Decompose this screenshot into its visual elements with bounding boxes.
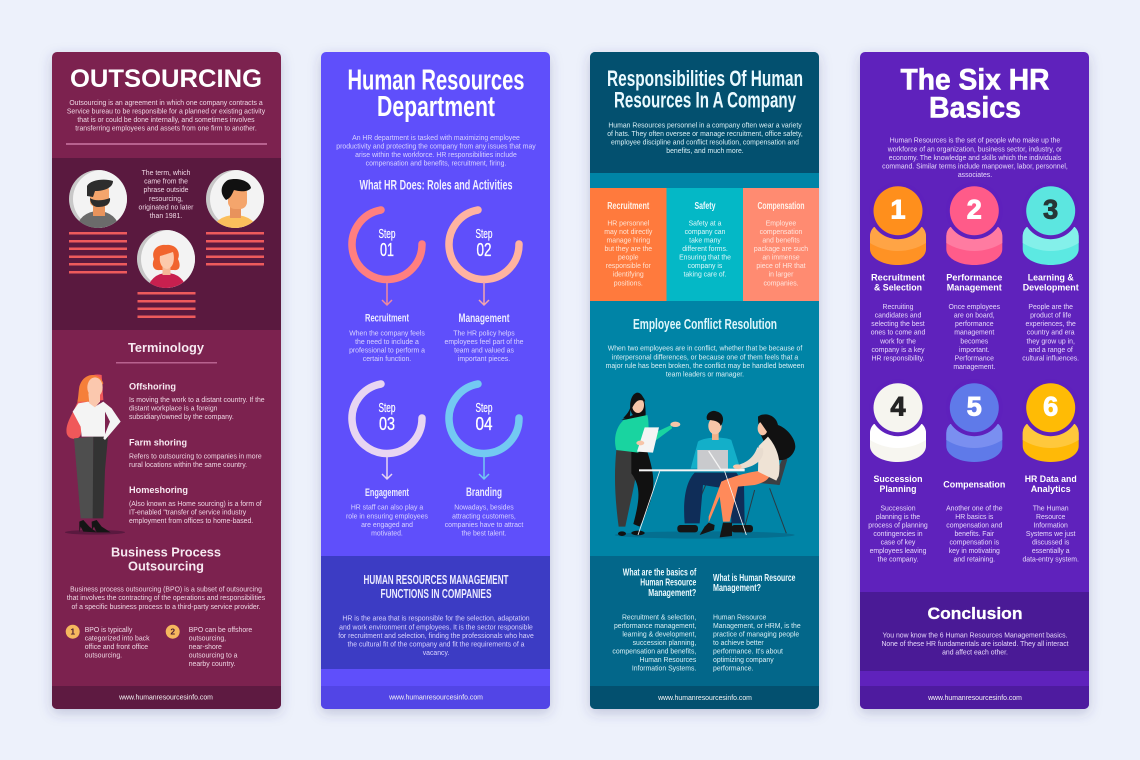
- icon: number 3: [1022, 182, 1079, 265]
- basic 6 text: Resource: [1036, 514, 1066, 521]
- step 01 text: professional to perform a: [349, 347, 425, 354]
- step 03 text: [346, 487, 429, 537]
- intro text: An HR department is tasked with maximizing employee: [352, 135, 520, 142]
- step 02 ring: [449, 210, 519, 279]
- intro text: Human Resources is the set of people who make up the: [890, 138, 1060, 145]
- intro text: compensation and benefits, recruitment, firing.: [366, 161, 506, 168]
- step 04 ring: [449, 384, 519, 453]
- step 04 text: Branding: [466, 487, 502, 499]
- panel: six hr basics: [860, 52, 1089, 709]
- basic 6 text: [1022, 474, 1079, 564]
- conclusion text: and affect each other.: [942, 649, 1008, 656]
- card: safety: different forms.: [682, 246, 728, 253]
- conflict text: interpersonal differences, or because one of them feels that a: [612, 354, 798, 361]
- origin text: came from the: [144, 179, 188, 186]
- a: what is: practice of managing people: [713, 631, 799, 638]
- intro text: [882, 138, 1068, 179]
- q: basics heading: Management?: [648, 587, 696, 599]
- arrow 3: [382, 456, 392, 479]
- basic 5 text: HR basics is: [955, 514, 994, 521]
- step 01 text: the need to include a: [355, 339, 419, 346]
- card: safety: taking care of.: [683, 272, 727, 279]
- basic 3 text: country and era: [1027, 330, 1075, 337]
- origin text: than 1981.: [150, 213, 182, 220]
- band text: HR is the area that is responsible for the selection, adaptation: [342, 616, 530, 623]
- icon: number 2: 2: [967, 194, 982, 224]
- term: offshoring: distant workplace is a foreign: [129, 406, 218, 413]
- basic 6 text: The Human: [1033, 505, 1069, 512]
- intro text: employee discipline and conflict resolution, compensation and: [611, 139, 799, 146]
- bpo point 2: 2: [170, 627, 175, 637]
- intro text: transferring employees and assets from one firm to another.: [75, 126, 257, 133]
- step 02 ring: 02: [476, 239, 492, 260]
- icon: number 1: 1: [890, 194, 906, 224]
- step 01 ring: Step: [378, 227, 396, 241]
- conclusion text: [881, 632, 1069, 656]
- step 01 text: Recruitment: [365, 313, 409, 325]
- step 01 text: certain function.: [363, 356, 411, 363]
- basic 6 text: Analytics: [1031, 484, 1071, 494]
- icon: number 4: 4: [890, 392, 906, 422]
- intro text: arise within the workforce. HR responsibilities include: [355, 152, 517, 159]
- basic 2 text: Performance: [955, 355, 994, 362]
- basic 2 text: important.: [959, 347, 990, 354]
- text lines under person: [206, 232, 264, 266]
- panel: human resources department: [321, 52, 550, 709]
- a: basics: [612, 614, 697, 673]
- card: recruitment: may not directly: [604, 229, 653, 236]
- step 03 ring: Step: [378, 401, 396, 415]
- card: recruitment: positions.: [614, 280, 643, 287]
- basic 1 text: Recruiting: [883, 304, 914, 311]
- basic 3 text: [1022, 273, 1079, 362]
- band text: the cultural fit of the company and fit the requirements of a: [348, 641, 525, 648]
- card: compensation: Employee: [766, 220, 796, 227]
- bpo paragraph: Business process outsourcing (BPO) is a subset of outsourcing: [70, 587, 262, 594]
- conflict text: major rule has been broken, the conflict may be handled between: [606, 363, 805, 370]
- bpo paragraph: that involves the contracting of the operations and responsibilities: [67, 595, 266, 602]
- heading: conflict resolution: Employee Conflict Resolution: [633, 316, 777, 333]
- bpo point 1: BPO is typically: [85, 627, 133, 634]
- avatar: red haired woman: [137, 230, 195, 288]
- title: outsourcing: OUTSOURCING: [70, 65, 262, 93]
- panel: outsourcing: [52, 52, 281, 709]
- step 02 text: employees feel part of the: [445, 339, 524, 346]
- a: basics: compensation and benefits,: [612, 649, 696, 656]
- basic 6 text: discussed is: [1032, 540, 1070, 547]
- card: safety: [666, 188, 743, 301]
- text lines under woman: [138, 292, 196, 318]
- bpo point 2: outsourcing,: [189, 636, 226, 643]
- card: safety: Safety: [694, 200, 716, 212]
- a: basics: Human Resources: [639, 657, 697, 664]
- title: Human Resources: [348, 64, 524, 96]
- q: what is heading: What is Human Resource: [713, 572, 796, 584]
- card: compensation: in larger: [769, 272, 794, 279]
- icon: number 5: 5: [967, 392, 982, 422]
- band heading: [364, 572, 509, 601]
- conflict text: When two employees are in conflict, whether that be because of: [608, 346, 802, 353]
- step 02 ring: Step: [476, 227, 493, 241]
- icon: number 3: 3: [1043, 194, 1058, 224]
- basic 1 text: company is a key: [872, 347, 925, 354]
- card: safety: company can: [685, 229, 726, 236]
- step 02 text: Management: [458, 313, 510, 325]
- q: what is heading: Management?: [713, 582, 761, 594]
- basic 2 text: management.: [953, 364, 995, 371]
- card: recruitment: HR personnel: [607, 220, 650, 227]
- a: what is: Human Resource: [713, 614, 767, 621]
- a: basics: succession planning,: [633, 640, 696, 647]
- title: [607, 66, 803, 112]
- band text: vacancy.: [423, 650, 449, 657]
- card: compensation: Compensation: [758, 200, 804, 212]
- step 03 text: are engaged and: [361, 522, 413, 529]
- intro text: [607, 122, 803, 155]
- bpo point 2: outsourcing to a: [189, 653, 238, 660]
- origin text: resourcing,: [149, 196, 183, 203]
- step 04 ring: 04: [476, 413, 492, 434]
- a: what is: performance. It's about: [713, 649, 783, 656]
- bpo point 1: outsourcing.: [85, 653, 122, 660]
- basic 2 text: [946, 273, 1002, 371]
- basic 5 text: key in motivating: [949, 548, 1000, 555]
- icon: number 2: [946, 182, 1003, 265]
- basic 1 text: selecting the best: [871, 321, 925, 328]
- title: Resources In A Company: [614, 87, 797, 112]
- term: offshoring: Offshoring: [129, 382, 176, 392]
- basic 5 text: Another one of the: [946, 505, 1003, 512]
- step 01 ring: [352, 210, 422, 279]
- heading: business process outsourcing: [111, 546, 221, 574]
- basic 3 text: Learning &: [1028, 273, 1074, 283]
- basic 1 text: & Selection: [874, 283, 922, 293]
- origin text: The term, which: [142, 170, 191, 177]
- bpo point 1: categorized into back: [85, 636, 150, 643]
- intro text: workforce of an organization, business sector, industry, or: [887, 146, 1063, 153]
- footer url: www.humanresourcesinfo.com: [657, 695, 752, 702]
- a: basics: Information Systems.: [632, 666, 696, 673]
- card: recruitment: but they are the: [604, 246, 652, 253]
- basic 3 text: People are the: [1028, 304, 1073, 311]
- title: The Six HR: [900, 63, 1050, 96]
- term: offshoring: [129, 382, 265, 421]
- term: farm shoring: [129, 438, 262, 469]
- basic 6 text: HR Data and: [1025, 474, 1077, 484]
- bpo point 1: 1: [70, 627, 75, 637]
- avatar: black haired person: [206, 170, 264, 228]
- q: what is heading: [713, 572, 796, 594]
- step 03 text: Engagement: [365, 487, 409, 499]
- card: compensation: and benefits: [762, 237, 800, 244]
- step 02 text: [445, 313, 524, 363]
- basic 1 text: [871, 273, 925, 362]
- basic 4 text: [868, 474, 928, 564]
- basic 6 text: data-entry system.: [1022, 557, 1079, 564]
- intro text: [336, 135, 536, 168]
- basic 2 text: management: [954, 330, 994, 337]
- a: basics: Recruitment & selection,: [622, 614, 696, 621]
- term: farm shoring: Refers to outsourcing to companies in more: [129, 453, 262, 460]
- arrow 2: [479, 282, 489, 305]
- bpo paragraph: [67, 587, 266, 611]
- step 04 text: Nowadays, besides: [454, 505, 514, 512]
- band text: [338, 616, 534, 657]
- card: recruitment: Recruitment: [607, 200, 650, 212]
- basic 5 text: Compensation: [943, 480, 1006, 490]
- basic 5 text: compensation is: [950, 540, 1000, 547]
- icon: number 4: [870, 379, 926, 462]
- bpo point 2: [166, 625, 252, 668]
- term: homeshoring: (Also known as Home sourcing) is a form of: [129, 501, 262, 508]
- band text: and work environment of employees. It is the sector responsible: [339, 624, 533, 631]
- card: compensation: [743, 188, 819, 301]
- footer url: www.humanresourcesinfo.com: [118, 694, 213, 702]
- icon: number 5: [946, 379, 1003, 462]
- heading: conclusion: Conclusion: [928, 604, 1022, 623]
- band text: for recruitment and selection, finding the professionals who have: [338, 633, 534, 640]
- conflict text: [606, 346, 805, 378]
- illustration: office meeting: [615, 393, 795, 539]
- basic 2 text: Performance: [946, 273, 1002, 283]
- step 03 text: role in ensuring employees: [346, 513, 429, 520]
- card: compensation: compensation: [760, 229, 803, 236]
- intro text: command. Similar terms include manpower, labor, personnel,: [882, 163, 1068, 170]
- basic 4 text: the company.: [878, 557, 918, 564]
- a: what is: performance.: [713, 666, 754, 673]
- intro text: productivity and protecting the company from any issues that may: [336, 144, 536, 151]
- a: what is: [713, 614, 801, 673]
- footer url: www.humanresourcesinfo.com: [927, 695, 1022, 702]
- a: basics: performance management,: [614, 623, 696, 630]
- card: recruitment: responsible for: [606, 263, 652, 270]
- card: compensation: package are such: [754, 246, 808, 253]
- intro text: Service bureau to be responsible for a planned or existing activity: [67, 109, 266, 116]
- intro text: of hats. They often oversee or manage recruitment, office safety,: [607, 131, 803, 138]
- band heading: HUMAN RESOURCES MANAGEMENT: [364, 572, 509, 587]
- term: homeshoring: [129, 485, 262, 525]
- basic 3 text: Development: [1023, 283, 1079, 293]
- footer url: www.humanresourcesinfo.com: [388, 694, 483, 702]
- card: recruitment: people: [618, 254, 639, 262]
- term: farm shoring: Farm shoring: [129, 438, 187, 448]
- basic 5 text: compensation and: [946, 522, 1003, 529]
- origin text: originated no later: [139, 204, 194, 211]
- basic 5 text: [943, 480, 1006, 564]
- intro text: economy. The knowledge and skills which the individuals: [889, 155, 1062, 162]
- heading: terminology: Terminology: [128, 341, 204, 355]
- basic 4 text: Succession: [874, 474, 923, 484]
- bpo point 2: BPO can be offshore: [189, 627, 252, 634]
- intro text: benefits, and much more.: [666, 148, 744, 155]
- step 02 text: team and valued as: [454, 347, 515, 354]
- bpo point 1: [66, 625, 150, 660]
- term: offshoring: subsidiary/owned by the company.: [129, 414, 234, 421]
- arrow 1: [382, 282, 392, 305]
- basic 3 text: experiences, the: [1026, 321, 1076, 328]
- icon: number 6: [1022, 379, 1079, 462]
- card: recruitment: manage hiring: [607, 237, 650, 244]
- basic 4 text: Planning: [880, 484, 917, 494]
- basic 2 text: Once employees: [949, 304, 1001, 311]
- title: Responsibilities Of Human: [607, 66, 803, 91]
- basic 6 text: Systems we just: [1026, 531, 1076, 538]
- step 04 text: [445, 487, 523, 537]
- step 03 ring: [352, 384, 422, 453]
- term: farm shoring: rural locations within the same country.: [129, 462, 247, 469]
- basic 2 text: are on board,: [954, 313, 995, 320]
- a: what is: optimizing company: [713, 657, 774, 664]
- step 04 ring: Step: [476, 401, 493, 415]
- term: homeshoring: employment from offices to home-based.: [129, 518, 253, 525]
- illustration: standing woman: [65, 375, 125, 535]
- basic 4 text: Succession: [880, 505, 916, 512]
- a: what is: Management, or HRM, is the: [713, 623, 801, 630]
- bpo point 2: nearby country.: [189, 661, 236, 668]
- basic 3 text: and a range of: [1029, 347, 1073, 354]
- basic 2 text: performance: [955, 321, 994, 328]
- basic 3 text: product of life: [1030, 313, 1071, 320]
- origin text: [139, 170, 194, 220]
- basic 6 text: Information: [1034, 522, 1068, 529]
- basic 2 text: becomes: [960, 338, 989, 345]
- card: compensation: companies.: [763, 280, 799, 287]
- origin text: phrase outside: [144, 187, 189, 194]
- icon: number 6: 6: [1043, 392, 1058, 422]
- arrow 4: [479, 456, 489, 479]
- basic 5 text: benefits. Fair: [954, 531, 995, 538]
- text lines under man: [69, 232, 127, 274]
- conclusion text: You now know the 6 Human Resources Management basics.: [882, 632, 1068, 639]
- step 03 ring: 03: [379, 413, 395, 434]
- panel: responsibilities of human resources: [590, 52, 819, 709]
- bpo point 2: near-shore: [189, 644, 222, 651]
- icon: number 1: [870, 182, 926, 265]
- intro text: Human Resources personnel in a company often wear a variety: [608, 122, 802, 129]
- step 01 text: When the company feels: [349, 330, 425, 337]
- title: [900, 63, 1050, 125]
- term: homeshoring: IT-enabled "transfer of service industry: [129, 510, 247, 517]
- step 04 text: the best talent.: [462, 530, 507, 537]
- q: basics heading: [623, 567, 697, 599]
- a: basics: learning & development,: [622, 631, 696, 638]
- intro text: that is or could be done internally, and sometimes involves: [77, 117, 255, 124]
- basic 4 text: employees leaving: [870, 548, 927, 555]
- heading: business process outsourcing: Outsourcing: [128, 560, 204, 574]
- basic 3 text: cultural influences.: [1022, 355, 1079, 362]
- basic 2 text: Management: [947, 283, 1002, 293]
- avatar: bearded man: [69, 170, 127, 228]
- a: what is: to achieve better: [713, 640, 764, 647]
- heading: business process outsourcing: Business Process: [111, 546, 221, 560]
- band heading: FUNCTIONS IN COMPANIES: [380, 586, 492, 601]
- title: Department: [377, 91, 495, 123]
- title: [348, 64, 524, 123]
- basic 4 text: planning is the: [876, 514, 920, 521]
- card: recruitment: identifying: [613, 272, 644, 279]
- bpo point 1: office and front office: [85, 644, 148, 651]
- title: Basics: [929, 92, 1021, 125]
- card: safety: Safety at a: [689, 220, 722, 227]
- basic 1 text: HR responsibility.: [872, 355, 925, 362]
- step 04 text: attracting customers,: [452, 513, 516, 520]
- card: recruitment: [590, 188, 666, 301]
- basic 6 text: essentially a: [1032, 548, 1070, 555]
- basic 5 text: and retaining.: [954, 557, 995, 564]
- intro text: Outsourcing is an agreement in which one company contracts a: [69, 100, 263, 107]
- basic 3 text: they grow up in,: [1026, 338, 1075, 345]
- basic 1 text: candidates and: [875, 313, 921, 320]
- step 02 text: The HR policy helps: [453, 330, 515, 337]
- card: compensation: an immense: [762, 254, 800, 262]
- term: offshoring: Is moving the work to a distant country. If the: [129, 397, 265, 404]
- basic 4 text: contingencies in: [873, 531, 923, 538]
- bpo paragraph: of a specific business process to a third-party service provider.: [71, 604, 261, 611]
- subheading: What HR Does: Roles and Activities: [360, 176, 513, 192]
- card: safety: company is: [688, 263, 723, 270]
- q: basics heading: Human Resource: [640, 577, 696, 589]
- q: basics heading: What are the basics of: [623, 567, 697, 579]
- basic 1 text: ones to come and: [871, 330, 925, 337]
- step 01 ring: 01: [380, 239, 394, 260]
- conclusion text: None of these HR fundamentals are isolated. They all interact: [881, 641, 1069, 648]
- step 03 text: motivated.: [371, 530, 403, 537]
- step 02 text: important pieces.: [458, 356, 510, 363]
- basic 4 text: process of planning: [868, 522, 928, 529]
- basic 1 text: work for the: [879, 338, 916, 345]
- step 04 text: companies have to attract: [445, 522, 523, 529]
- term: homeshoring: Homeshoring: [129, 485, 188, 495]
- step 03 text: HR staff can also play a: [351, 505, 423, 512]
- intro text: [67, 100, 266, 133]
- intro text: associates.: [958, 172, 992, 179]
- basic 4 text: case of key: [881, 540, 916, 547]
- step 01 text: [349, 313, 425, 363]
- basic 1 text: Recruitment: [871, 273, 925, 283]
- conflict text: team leaders or manager.: [666, 371, 744, 378]
- card: compensation: piece of HR that: [756, 263, 806, 270]
- card: safety: take many: [689, 237, 721, 244]
- card: safety: Ensuring that the: [679, 254, 731, 262]
